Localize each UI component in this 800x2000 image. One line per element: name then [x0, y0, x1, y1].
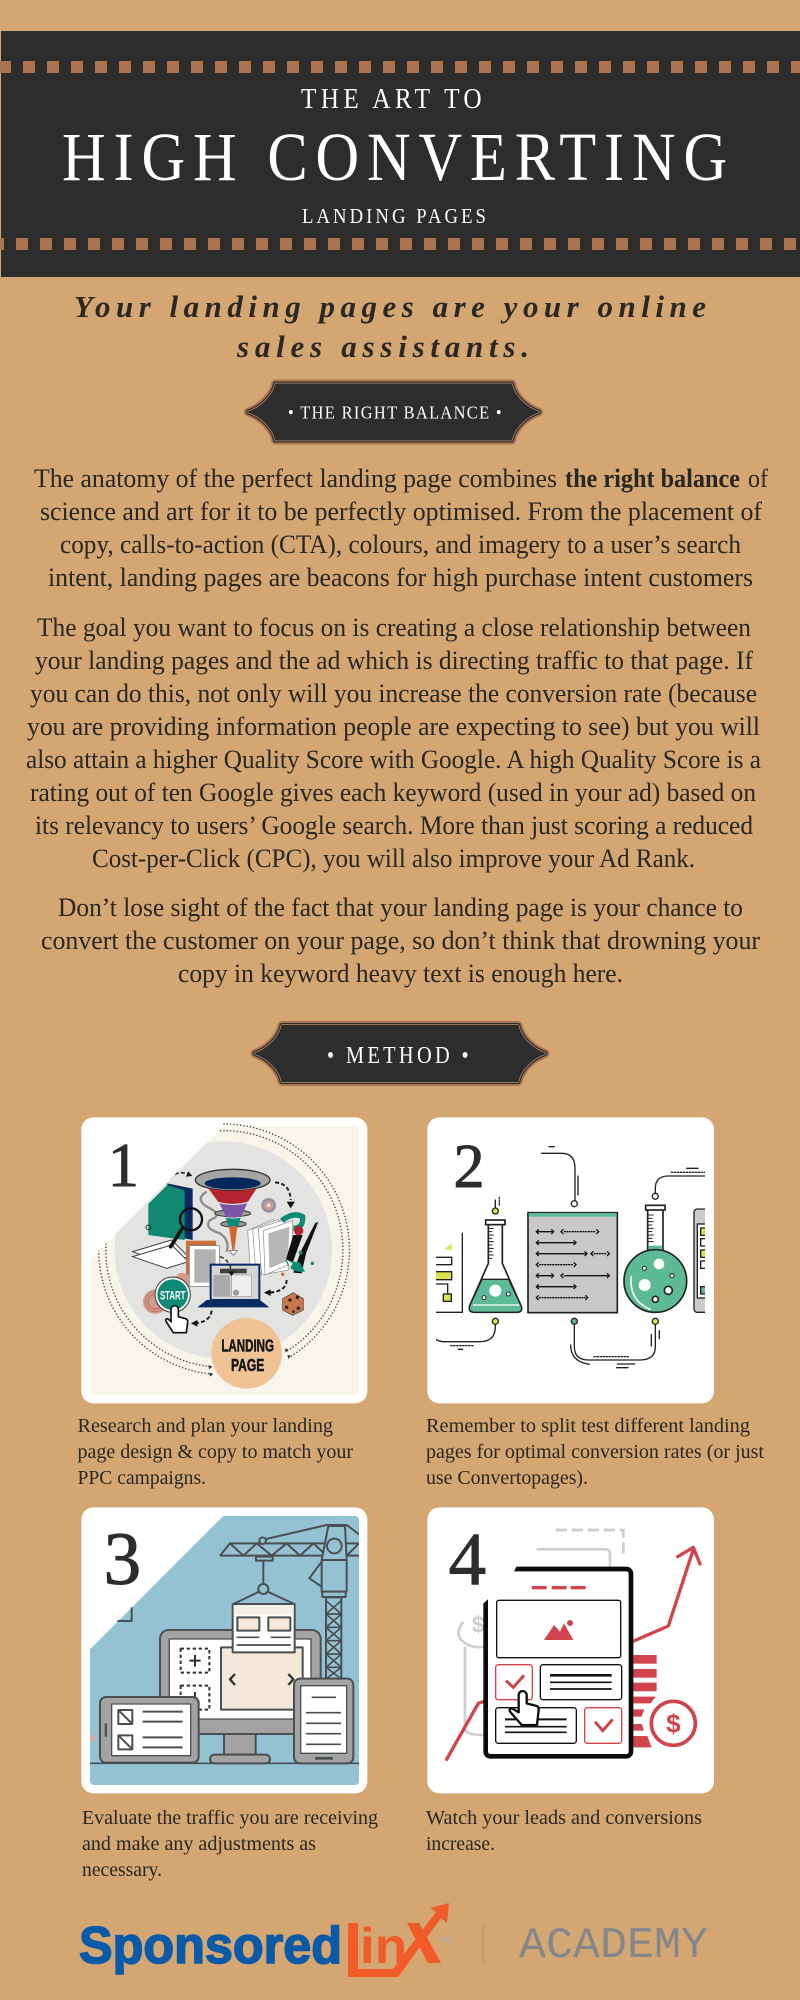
flask round	[624, 1205, 687, 1312]
logo: academy: ACADEMY	[519, 1921, 708, 1971]
caption 1: Research and plan your landing	[78, 1416, 333, 1437]
caption 2: pages for optimal conversion rates (or just	[426, 1442, 765, 1463]
icon: magnifier	[171, 1208, 202, 1247]
dashed arrows	[170, 1173, 291, 1323]
connectors	[433, 1147, 710, 1368]
paragraph 1: the right balance	[565, 464, 740, 493]
card 2: split test illustration	[427, 1117, 721, 1403]
paragraph 2: rating out of ten Google gives each keyword (used in your ad) based on	[30, 778, 756, 807]
icon: funnel	[195, 1169, 270, 1255]
badge: method	[255, 1026, 545, 1082]
hanging module	[233, 1604, 295, 1652]
icon: paint brushes	[281, 1215, 318, 1276]
tagline: sales assistants.	[236, 329, 529, 364]
number 4: 4	[449, 1519, 486, 1602]
header banner	[0, 31, 800, 277]
icon: cursor hand	[510, 1691, 539, 1725]
caption 2: use Convertopages).	[426, 1468, 588, 1489]
caption 1	[78, 1416, 354, 1489]
icon: paper stack	[248, 1219, 293, 1275]
badge: the right balance: • THE RIGHT BALANCE •	[288, 402, 503, 422]
logo: sponsoredlinx: in	[360, 1918, 407, 1974]
icon: laptop	[197, 1265, 269, 1307]
number 1: 1	[108, 1132, 139, 1200]
paragraph 1: copy, calls-to-action (CTA), colours, and imagery to a user’s search	[60, 530, 741, 559]
white corner	[90, 1516, 223, 1649]
left document	[433, 1233, 462, 1312]
icon: pointer hand	[166, 1306, 188, 1333]
caption 1: page design & copy to match your	[78, 1442, 354, 1463]
caption 4: Watch your leads and conversions	[426, 1808, 702, 1829]
tagline: Your landing pages are your online	[74, 289, 706, 324]
paragraph 1: The anatomy of the perfect landing page combines	[34, 464, 557, 493]
title line: landing pages: LANDING PAGES	[302, 204, 489, 228]
caption 1: PPC campaigns.	[78, 1468, 206, 1489]
paragraph 3: Don’t lose sight of the fact that your landing page is your chance to	[58, 893, 743, 922]
paragraph 1: science and art for it to be perfectly optimised. From the placement of	[40, 497, 762, 526]
badge: the right balance	[248, 384, 538, 440]
paragraph 3	[41, 893, 760, 988]
caption 3: Evaluate the traffic you are receiving	[82, 1808, 378, 1829]
coin	[651, 1701, 695, 1745]
landing page circle	[211, 1318, 282, 1389]
right tablet	[294, 1679, 353, 1763]
caption 3	[82, 1808, 378, 1881]
badge: method: • METHOD •	[327, 1043, 472, 1069]
right document	[693, 1208, 705, 1313]
title line: the art to: THE ART TO	[301, 83, 486, 115]
caption 3: necessary.	[82, 1860, 162, 1881]
icon: start button: START	[160, 1288, 186, 1302]
paragraph 3: convert the customer on your page, so don’t think that drowning your	[41, 926, 760, 955]
landing page circle: PAGE	[231, 1355, 264, 1375]
white corner	[90, 1126, 223, 1259]
paragraph 2: Cost-per-Click (CPC), you will also improve your Ad Rank.	[92, 844, 695, 873]
tagline	[74, 289, 706, 364]
card 4: watch conversions illustration: $	[472, 1612, 485, 1638]
page tablet	[480, 1565, 631, 1756]
icon: target small	[261, 1198, 276, 1213]
paragraph 2: The goal you want to focus on is creating a close relationship between	[37, 613, 751, 642]
left tablet	[100, 1697, 199, 1763]
red stack	[633, 1655, 657, 1747]
paragraph 1: intent, landing pages are beacons for high purchase intent customers	[48, 563, 753, 592]
paragraph 2: you can do this, not only will you increase the conversion rate (because	[30, 679, 757, 708]
red growth arrow	[447, 1547, 700, 1759]
icon: start button	[143, 1277, 190, 1314]
icon: book	[133, 1183, 193, 1268]
flask left	[469, 1220, 522, 1312]
card 4: watch conversions illustration	[427, 1507, 714, 1793]
paragraph 2: its relevancy to users’ Google search. More than just scoring a reduced	[35, 811, 753, 840]
paragraph 2: also attain a higher Quality Score with Google. A high Quality Score is a	[26, 745, 761, 774]
logo: sponsoredlinx: TM	[440, 1937, 450, 1944]
landing page circle: LANDING	[221, 1336, 274, 1356]
paragraph 1	[34, 464, 768, 592]
number 3: 3	[104, 1518, 141, 1601]
monitor	[160, 1630, 321, 1763]
coin: $	[666, 1709, 681, 1739]
caption 2	[426, 1416, 765, 1489]
icon: documents	[174, 1241, 219, 1290]
divider	[482, 1925, 484, 1963]
paragraph 2: you are providing information people are expecting to see) but you will	[27, 712, 760, 741]
caption 3: and make any adjustments as	[82, 1834, 316, 1855]
paragraph 2: your landing pages and the ad which is directing traffic to that page. If	[35, 646, 753, 675]
logo: sponsoredlinx	[79, 1903, 450, 1977]
icon: dice	[283, 1293, 303, 1315]
logo: sponsoredlinx: Sponsored	[79, 1917, 342, 1975]
number 2: 2	[453, 1133, 484, 1201]
caption 4: increase.	[426, 1834, 495, 1855]
paragraph 2	[26, 613, 761, 873]
paragraph 1: of	[748, 464, 768, 493]
caption 2: Remember to split test different landing	[426, 1416, 750, 1437]
card 3: evaluate illustration	[81, 1507, 367, 1793]
crane	[220, 1525, 367, 1679]
caption 4	[426, 1808, 702, 1855]
code panel	[528, 1213, 617, 1313]
grey background shapes	[459, 1530, 623, 1735]
card 1: research illustration	[81, 1117, 367, 1403]
paragraph 3: copy in keyword heavy text is enough here.	[178, 959, 623, 988]
